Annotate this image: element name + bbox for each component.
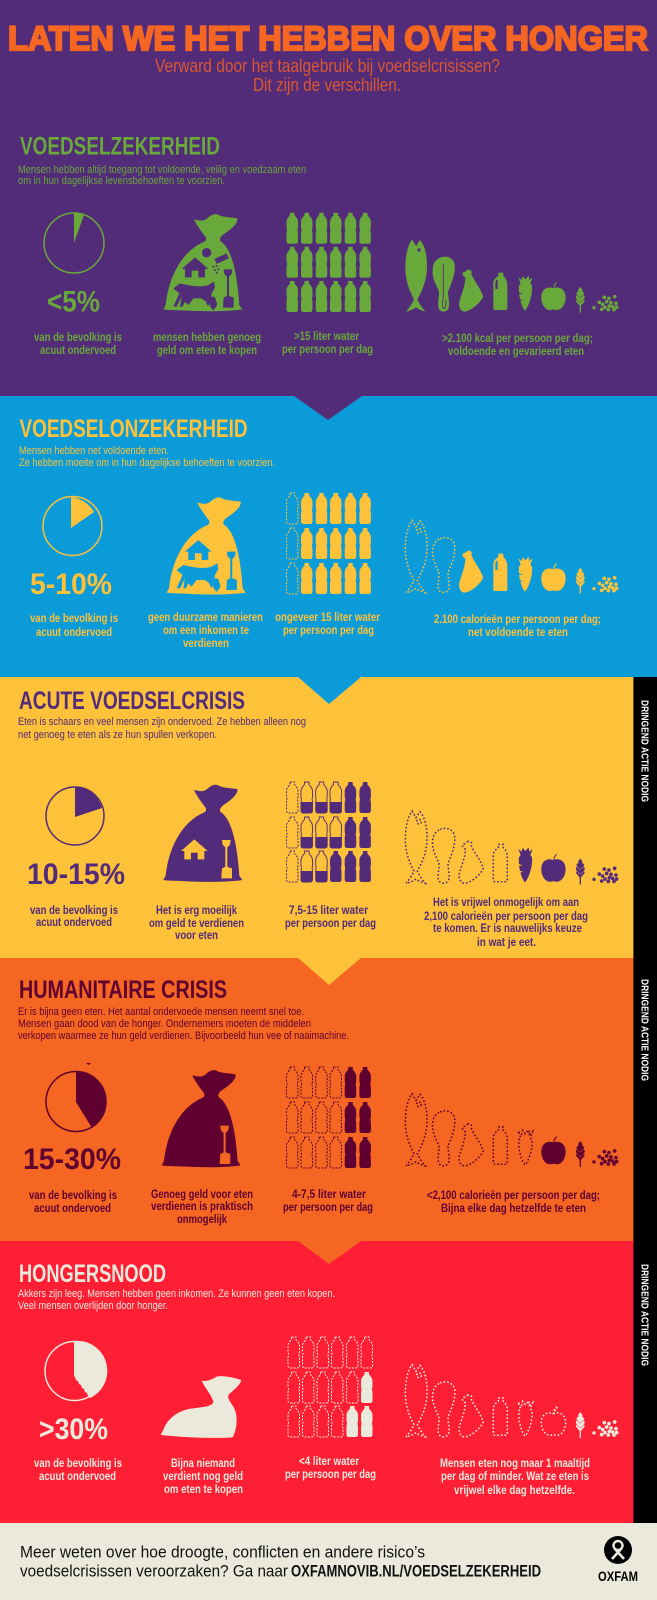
caption: water bbox=[285, 1454, 376, 1481]
description: Ze hebben moeite om in hun dagelijkse behoeften te voorzien. bbox=[19, 457, 275, 469]
description: Eten is schaars en veel mensen zijn ondervoed. Ze hebben alleen nog bbox=[18, 716, 306, 728]
caption: food: 2,100 calorieën per persoon per dag bbox=[424, 909, 588, 923]
icon: food row bbox=[405, 239, 618, 313]
description bbox=[19, 445, 275, 469]
heading: ACUTE VOEDSELCRISIS bbox=[19, 687, 245, 715]
pie chart: 10-15% bbox=[46, 787, 104, 845]
caption: water: 7,5-15 liter water bbox=[289, 903, 368, 917]
caption: food: in wat je eet. bbox=[477, 935, 536, 949]
description bbox=[18, 1006, 349, 1042]
arrow: orange into red bbox=[298, 1241, 361, 1264]
caption: food bbox=[442, 331, 593, 358]
heading: VOEDSELZEKERHEID bbox=[20, 132, 220, 160]
caption: food: Mensen eten nog maar 1 maaltijd bbox=[440, 1456, 590, 1470]
caption: population: van de bevolking is bbox=[30, 611, 118, 625]
description: verkopen waarmee ze hun geld verdienen. Bijvoorbeeld hun vee of naaimachine. bbox=[18, 1030, 349, 1042]
caption: food: voldoende en gevarieerd eten bbox=[448, 344, 584, 358]
panel: voedselonzekerheid bbox=[0, 396, 657, 677]
caption: water: 4-7,5 liter water bbox=[292, 1187, 366, 1201]
caption: population: acuut ondervoed bbox=[36, 625, 112, 639]
footer bbox=[0, 1523, 657, 1600]
icon: food row bbox=[405, 1094, 618, 1167]
caption: water bbox=[275, 610, 380, 637]
pie chart: over 30% bbox=[45, 1341, 107, 1400]
caption: food: per dag of minder. Wat ze eten is bbox=[441, 1469, 589, 1483]
caption: population bbox=[29, 1188, 117, 1215]
icon: sack bbox=[162, 1070, 241, 1167]
caption: sack: om een inkomen te bbox=[163, 623, 249, 637]
subtitle bbox=[155, 56, 500, 95]
caption: sack: verdient nog geld bbox=[163, 1469, 243, 1483]
caption: population: van de bevolking is bbox=[34, 1456, 122, 1470]
footer text: OXFAMNOVIB.NL/VOEDSELZEKERHEID bbox=[291, 1562, 541, 1580]
caption: food bbox=[434, 612, 601, 639]
caption: sack bbox=[151, 1187, 253, 1226]
caption: food: Bijna elke dag hetzelfde te eten bbox=[441, 1201, 586, 1215]
footer text: voedselcrisissen veroorzaken? Ga naar bbox=[20, 1562, 288, 1580]
caption: food: <2,100 calorieën per persoon per dag; bbox=[427, 1188, 600, 1202]
caption: food bbox=[424, 895, 588, 949]
caption: sack: voor eten bbox=[175, 928, 218, 942]
caption: water bbox=[285, 903, 376, 930]
caption: water: per persoon per dag bbox=[282, 342, 373, 356]
logo: oxfam: OXFAM bbox=[598, 1568, 638, 1584]
panel: voedselzekerheid bbox=[0, 0, 657, 396]
caption: sack: onmogelijk bbox=[177, 1212, 227, 1226]
heading: HUMANITAIRE CRISIS bbox=[19, 976, 227, 1004]
caption: water bbox=[283, 1187, 373, 1214]
caption: sack: geld om eten te kopen bbox=[157, 343, 257, 357]
caption: food: vrijwel elke dag hetzelfde. bbox=[454, 1483, 575, 1497]
caption: population: acuut ondervoed bbox=[39, 1469, 116, 1483]
description: Mensen hebben net voldoende eten. bbox=[19, 445, 169, 457]
icon: water bottles bbox=[286, 213, 371, 312]
pie chart: under 5% bbox=[44, 213, 104, 273]
caption: sack bbox=[149, 903, 244, 942]
footer text bbox=[20, 1542, 541, 1580]
caption: sack: geen duurzame manieren bbox=[148, 610, 263, 624]
vertical label 2: DRINGEND ACTIE NODIG bbox=[638, 979, 650, 1081]
sidebar: urgent action bbox=[633, 677, 657, 1523]
description bbox=[18, 1288, 335, 1312]
heading: HONGERSNOOD bbox=[19, 1260, 166, 1288]
caption: sack: Het is erg moeilijk bbox=[156, 903, 237, 917]
caption: population bbox=[34, 330, 122, 357]
caption: food: Het is vrijwel onmogelijk om aan bbox=[433, 895, 579, 909]
subtitle: Dit zijn de verschillen. bbox=[253, 75, 401, 95]
caption: population: acuut ondervoed bbox=[36, 915, 112, 929]
icon: water bottles bbox=[288, 1337, 372, 1437]
icon: water bottles bbox=[286, 493, 371, 594]
caption: sack bbox=[163, 1456, 243, 1496]
panel: humanitaire crisis bbox=[0, 958, 657, 1241]
description: Akkers zijn leeg. Mensen hebben geen inkomen. Ze kunnen geen eten kopen. bbox=[18, 1288, 335, 1300]
description bbox=[18, 716, 306, 741]
arrow: purple into blue bbox=[294, 396, 362, 420]
caption: water: per persoon per dag bbox=[283, 623, 374, 637]
icon: full money sack bbox=[163, 214, 242, 311]
footer text: Meer weten over hoe droogte, conflicten en andere risico’s bbox=[20, 1542, 425, 1562]
arrow: blue into yellow bbox=[298, 677, 361, 704]
description: net genoeg te eten als ze hun spullen verkopen. bbox=[18, 729, 217, 741]
caption: food: net voldoende te eten bbox=[468, 625, 568, 639]
icon: sack bbox=[163, 785, 242, 882]
icon: food row bbox=[405, 811, 618, 884]
caption: sack: Genoeg geld voor eten bbox=[151, 1187, 253, 1201]
figure: 10-15%: 10-15% bbox=[27, 858, 125, 891]
caption: water: per persoon per dag bbox=[285, 1467, 376, 1481]
caption: sack: verdienen is praktisch bbox=[151, 1199, 253, 1213]
pie chart: 15-30% bbox=[46, 1063, 107, 1132]
caption: food: >2.100 kcal per persoon per dag; bbox=[442, 331, 593, 345]
vertical label 1: DRINGEND ACTIE NODIG bbox=[638, 700, 650, 802]
icon: water bottles bbox=[286, 782, 371, 882]
panel: hongersnood bbox=[0, 1241, 657, 1523]
figure: 5-10%: 5-10% bbox=[30, 568, 112, 601]
caption: food: 2.100 calorieën per persoon per dag; bbox=[434, 612, 601, 626]
pie chart: 5-10% bbox=[43, 496, 102, 556]
caption: food bbox=[427, 1188, 600, 1215]
figure: >30%: >30% bbox=[39, 1413, 108, 1446]
caption: food: te komen. Er is nauwelijks keuze bbox=[433, 921, 582, 935]
heading: VOEDSELONZEKERHEID bbox=[20, 415, 247, 443]
description: Er is bijna geen eten. Het aantal ondervoede mensen neemt snel toe. bbox=[18, 1006, 304, 1018]
caption: water: per persoon per dag bbox=[283, 1200, 373, 1214]
caption: water bbox=[282, 329, 373, 356]
caption: sack: verdienen bbox=[183, 636, 229, 650]
caption: water: >15 liter water bbox=[294, 329, 359, 343]
caption: population: van de bevolking is bbox=[29, 1188, 117, 1202]
icon: empty sack bbox=[161, 1376, 241, 1438]
logo: oxfam bbox=[598, 1536, 638, 1584]
caption: sack bbox=[148, 610, 263, 650]
caption: water: ongeveer 15 liter water bbox=[275, 610, 380, 624]
caption: sack: Bijna niemand bbox=[171, 1456, 235, 1470]
caption: sack: om eten te kopen bbox=[164, 1482, 243, 1496]
icon: food row bbox=[405, 520, 618, 594]
description: Mensen gaan dood van de honger. Ondernemers moeten de middelen bbox=[18, 1018, 311, 1030]
description bbox=[18, 164, 306, 187]
subtitle: Verward door het taalgebruik bij voedselcrisissen? bbox=[155, 56, 500, 76]
description: Veel mensen overlijden door honger. bbox=[18, 1300, 168, 1312]
figure: <5%: <5% bbox=[47, 286, 100, 318]
caption: population: acuut ondervoed bbox=[40, 343, 116, 357]
icon: sack bbox=[167, 497, 246, 595]
caption: food bbox=[440, 1456, 590, 1497]
description: om in hun dagelijkse levensbehoeften te voorzien. bbox=[18, 175, 225, 187]
caption: sack: om geld te verdienen bbox=[149, 916, 244, 930]
arrow: yellow into orange bbox=[298, 958, 361, 985]
caption: population: van de bevolking is bbox=[30, 903, 118, 917]
caption: water: <4 liter water bbox=[299, 1454, 359, 1468]
caption: water: per persoon per dag bbox=[285, 916, 376, 930]
caption: population: acuut ondervoed bbox=[34, 1201, 111, 1215]
caption: sack bbox=[153, 330, 261, 357]
caption: population bbox=[30, 903, 118, 929]
description: Mensen hebben altijd toegang tot voldoende, veilig en voedzaam eten bbox=[18, 164, 306, 176]
caption: population bbox=[30, 611, 118, 639]
icon: food row bbox=[405, 1365, 618, 1438]
caption: population: van de bevolking is bbox=[34, 330, 122, 344]
icon: water bottles bbox=[286, 1067, 371, 1168]
caption: sack: mensen hebben genoeg bbox=[153, 330, 261, 344]
figure: 15-30%: 15-30% bbox=[23, 1143, 121, 1176]
caption: population bbox=[34, 1456, 122, 1483]
panel: acute voedselcrisis bbox=[0, 677, 657, 958]
vertical label 3: DRINGEND ACTIE NODIG bbox=[638, 1264, 650, 1366]
